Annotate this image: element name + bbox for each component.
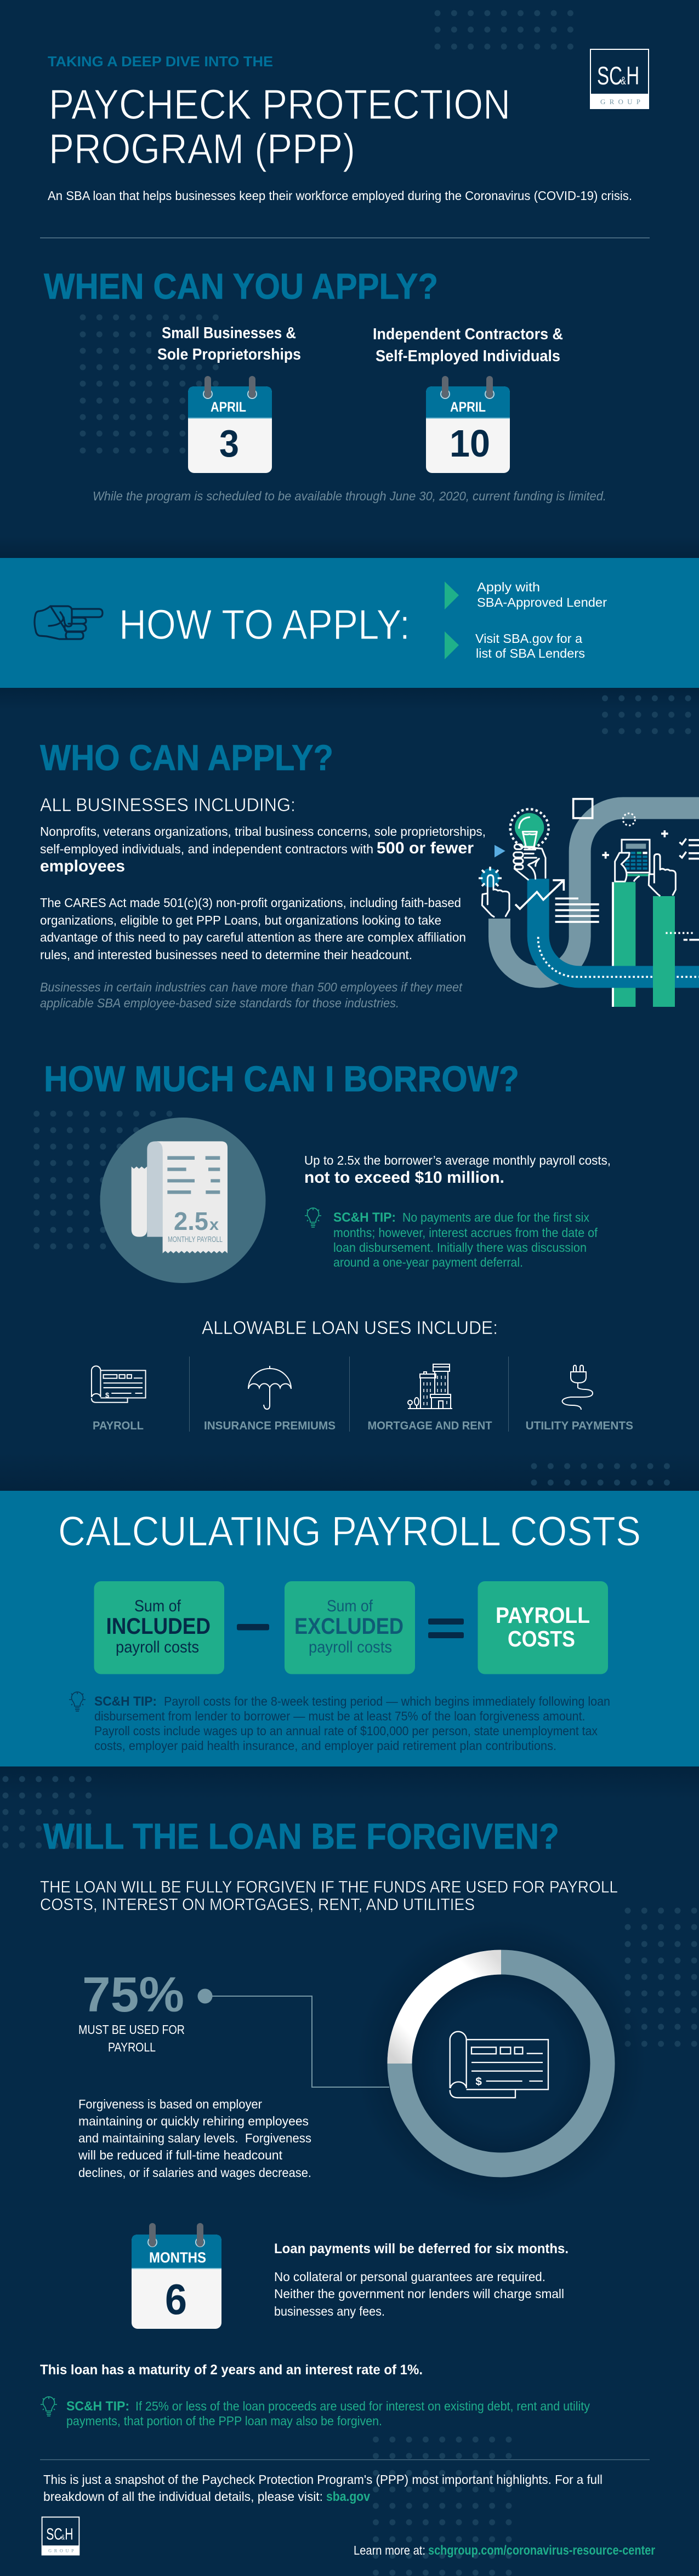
use: payroll: PAYROLL bbox=[93, 1420, 144, 1432]
box: excluded: EXCLUDED bbox=[294, 1613, 404, 1639]
heading: CALCULATING PAYROLL COSTS bbox=[58, 1508, 641, 1555]
SC&H tip: around a one-year payment deferral. bbox=[333, 1255, 523, 1269]
eligibility text: 500 or fewer bbox=[377, 839, 474, 857]
title: PROGRAM (PPP) bbox=[49, 126, 355, 173]
box: included: INCLUDED bbox=[106, 1613, 211, 1639]
section: how much can I borrow bbox=[37, 1058, 633, 1432]
subtitle: An SBA loan that helps businesses keep their workforce employed during the Coronavirus (COVID-19) crisis. bbox=[48, 189, 632, 203]
header bbox=[48, 13, 649, 203]
CARES Act text: advantage of this need to pay careful attention as there are complex affiliation bbox=[40, 930, 466, 944]
heading: WHEN CAN YOU APPLY? bbox=[44, 266, 438, 306]
logo: & bbox=[61, 2534, 65, 2541]
SC&H tip: SC&H TIP: bbox=[66, 2399, 129, 2414]
box: payroll costs: COSTS bbox=[508, 1626, 575, 1651]
logo: SC bbox=[46, 2526, 62, 2543]
step: lender: Apply with bbox=[477, 580, 540, 594]
column heading: small businesses: Small Businesses & bbox=[162, 324, 296, 342]
calendar: April 3: APRIL bbox=[211, 400, 246, 415]
icon: paycheck: $ bbox=[475, 2076, 482, 2088]
italic note: applicable SBA employee-based size standards for those industries. bbox=[40, 996, 399, 1010]
step: visit bbox=[475, 631, 585, 660]
CARES Act text: organizations, eligible to get PPP Loans, but organizations looking to take bbox=[40, 913, 441, 927]
deferment text: Neither the government nor lenders will charge small bbox=[274, 2287, 564, 2301]
calendar: April 10 bbox=[426, 376, 510, 473]
calendar: 6 months: 6 bbox=[165, 2275, 187, 2323]
box: excluded bbox=[285, 1581, 415, 1674]
use: insurance premiums bbox=[204, 1366, 336, 1432]
loan limit text: not to exceed $10 million. bbox=[304, 1169, 504, 1187]
deferment text: businesses any fees. bbox=[274, 2304, 385, 2318]
section: when can you apply bbox=[44, 266, 606, 503]
band: how to apply bbox=[0, 558, 699, 688]
band: calculating payroll costs bbox=[0, 1491, 699, 1766]
column heading: independent contractors bbox=[373, 326, 563, 365]
SC&H tip: months; however, interest accrues from the date of bbox=[333, 1226, 598, 1240]
box: excluded: payroll costs bbox=[309, 1638, 392, 1656]
heading: HOW MUCH CAN I BORROW? bbox=[44, 1058, 519, 1099]
heading: HOW TO APPLY: bbox=[119, 601, 410, 648]
icon: tip bulb bbox=[41, 2397, 57, 2416]
logo: H bbox=[65, 2526, 73, 2543]
icon: pointing hand bbox=[35, 606, 103, 639]
use: utility payments bbox=[526, 1365, 633, 1432]
closing text bbox=[43, 2472, 603, 2504]
75 percent stat: 75% bbox=[82, 1968, 184, 2022]
forgiveness text: declines, or if salaries and wages decrease. bbox=[78, 2165, 311, 2180]
box: included bbox=[94, 1581, 224, 1674]
icon: tip bulb bbox=[305, 1208, 321, 1227]
box: included: payroll costs bbox=[116, 1638, 199, 1656]
calendar: April 10: APRIL bbox=[450, 400, 486, 415]
CARES Act text bbox=[40, 896, 466, 962]
deferment text: Loan payments will be deferred for six months. bbox=[274, 2241, 569, 2256]
use: payroll bbox=[92, 1366, 146, 1432]
CARES Act text: rules, and interested businesses need to determine their headcount. bbox=[40, 948, 412, 962]
box: excluded: Sum of bbox=[327, 1597, 373, 1615]
column heading: independent contractors: Self-Employed Individuals bbox=[376, 347, 560, 365]
SC&H tip bbox=[94, 1694, 610, 1753]
use: utility payments: UTILITY PAYMENTS bbox=[526, 1420, 633, 1432]
subheading: COSTS, INTEREST ON MORTGAGES, RENT, AND UTILITIES bbox=[40, 1895, 475, 1914]
step: lender bbox=[477, 580, 607, 609]
italic note: Businesses in certain industries can have more than 500 employees if they meet bbox=[40, 980, 463, 994]
receipt text: MONTHLY PAYROLL bbox=[168, 1235, 223, 1244]
box: included: Sum of bbox=[134, 1597, 181, 1615]
arrow bbox=[445, 631, 459, 659]
icon: paycheck bbox=[450, 2032, 548, 2098]
use: mortgage and rent: MORTGAGE AND RENT bbox=[367, 1420, 492, 1432]
funding note: While the program is scheduled to be available through June 30, 2020, current funding is limited. bbox=[93, 489, 606, 503]
logo: H bbox=[626, 62, 639, 90]
closing text: breakdown of all the individual details, please visit: bbox=[43, 2489, 323, 2504]
use: insurance premiums: INSURANCE PREMIUMS bbox=[204, 1420, 336, 1432]
forgiveness text bbox=[78, 2097, 311, 2180]
SC&H tip: loan disbursement. Initially there was discussion bbox=[333, 1240, 587, 1255]
box: payroll costs: PAYROLL bbox=[496, 1603, 590, 1628]
SC&H tip: disbursement from lender to borrower — must be at least 75% of the loan forgiveness amount. bbox=[94, 1709, 586, 1723]
SC&H tip bbox=[66, 2399, 590, 2428]
column heading: small businesses bbox=[157, 324, 301, 363]
section: will the loan be forgiven bbox=[5, 1779, 695, 2428]
step: visit: list of SBA Lenders bbox=[476, 646, 585, 660]
SC&H tip: costs, employer paid health insurance, and employer paid retirement plan contributions. bbox=[94, 1739, 556, 1753]
receipt text: 2.5 bbox=[174, 1207, 208, 1235]
calendar: 6 months: MONTHS bbox=[149, 2249, 206, 2266]
receipt text: x bbox=[209, 1216, 219, 1234]
forgiveness text: Forgiveness is based on employer bbox=[78, 2097, 262, 2111]
step: lender: SBA-Approved Lender bbox=[477, 595, 607, 609]
CARES Act text: The CARES Act made 501(c)(3) non-profit organizations, including faith-based bbox=[40, 896, 461, 910]
logo bbox=[42, 2517, 79, 2555]
logo: SC bbox=[597, 62, 622, 90]
75 percent stat bbox=[78, 1968, 185, 2054]
learn more link: schgroup.com/coronavirus-resource-center bbox=[428, 2543, 655, 2558]
SC&H tip: No payments are due for the first six bbox=[402, 1210, 589, 1224]
subheading: ALL BUSINESSES INCLUDING: bbox=[40, 795, 295, 816]
heading: WILL THE LOAN BE FORGIVEN? bbox=[43, 1816, 559, 1856]
forgiveness text: will be reduced if full-time headcount bbox=[78, 2148, 283, 2162]
SC&H tip: Payroll costs for the 8-week testing period — which begins immediately following loan bbox=[164, 1694, 610, 1708]
calendar: April 3 bbox=[188, 376, 272, 473]
closing text: sba.gov bbox=[326, 2489, 371, 2504]
maturity statement: This loan has a maturity of 2 years and an interest rate of 1%. bbox=[40, 2362, 423, 2378]
use: mortgage and rent bbox=[367, 1364, 492, 1432]
logo bbox=[590, 49, 649, 109]
eligibility text: employees bbox=[40, 857, 125, 875]
SC&H tip: Payroll costs include wages up to an annual rate of $100,000 per person, state unemployment tax bbox=[94, 1724, 598, 1738]
learn more link: Learn more at: bbox=[354, 2543, 425, 2557]
arrow bbox=[445, 582, 459, 609]
75 percent stat: MUST BE USED FOR bbox=[78, 2022, 185, 2037]
illustration: business pipes and hands bbox=[479, 799, 699, 1007]
donut chart: 75 percent bbox=[356, 1918, 646, 2209]
allowable uses heading: ALLOWABLE LOAN USES INCLUDE: bbox=[202, 1318, 498, 1338]
eligibility text bbox=[40, 824, 486, 875]
deferment text bbox=[274, 2241, 569, 2318]
step: visit: Visit SBA.gov for a bbox=[475, 631, 582, 646]
SC&H tip: SC&H TIP: bbox=[333, 1210, 396, 1225]
closing text: This is just a snapshot of the Paycheck Protection Program's (PPP) most important highlights. For a full bbox=[43, 2472, 603, 2487]
calendar: 6 months bbox=[132, 2223, 221, 2329]
icon: tip bulb bbox=[69, 1692, 86, 1711]
forgiveness text: maintaining or quickly rehiring employees bbox=[78, 2114, 309, 2128]
subheading: THE LOAN WILL BE FULLY FORGIVEN IF THE FUNDS ARE USED FOR PAYROLL bbox=[40, 1877, 618, 1896]
SC&H tip bbox=[333, 1210, 598, 1269]
footer bbox=[40, 2440, 655, 2573]
icon: receipt bbox=[132, 1141, 228, 1253]
column heading: independent contractors: Independent Contractors & bbox=[373, 326, 563, 343]
deferment text: No collateral or personal guarantees are required. bbox=[274, 2270, 545, 2284]
SC&H tip: payments, that portion of the PPP loan may also be forgiven. bbox=[66, 2414, 382, 2428]
logo: & bbox=[621, 75, 626, 87]
75 percent stat: PAYROLL bbox=[108, 2040, 156, 2054]
SC&H tip: If 25% or less of the loan proceeds are used for interest on existing debt, rent and utility bbox=[135, 2399, 590, 2413]
heading: WHO CAN APPLY? bbox=[40, 737, 333, 778]
column heading: small businesses: Sole Proprietorships bbox=[157, 346, 301, 363]
calendar: April 3: 3 bbox=[219, 422, 239, 465]
use: payroll: $ bbox=[105, 1391, 110, 1399]
learn more link bbox=[354, 2543, 655, 2558]
eligibility text: self-employed individuals, and independent contractors with bbox=[40, 842, 373, 856]
subheading bbox=[40, 1877, 618, 1914]
eyebrow heading: TAKING A DEEP DIVE INTO THE bbox=[48, 53, 273, 70]
equals sign bbox=[428, 1618, 464, 1638]
logo: GROUP bbox=[48, 2548, 74, 2553]
section: who can apply bbox=[40, 698, 699, 1010]
minus sign bbox=[237, 1624, 269, 1630]
forgiveness text: and maintaining salary levels. Forgiveness bbox=[78, 2131, 311, 2145]
loan limit text bbox=[304, 1153, 611, 1187]
receipt circle bbox=[100, 1118, 265, 1283]
box: payroll costs bbox=[478, 1581, 608, 1674]
calendar: April 10: 10 bbox=[450, 422, 490, 465]
loan limit text: Up to 2.5x the borrower’s average monthly payroll costs, bbox=[304, 1153, 611, 1167]
eligibility text: Nonprofits, veterans organizations, tribal business concerns, sole proprietorships, bbox=[40, 824, 486, 839]
SC&H tip: SC&H TIP: bbox=[94, 1694, 157, 1709]
italic note bbox=[40, 980, 463, 1010]
receipt text bbox=[168, 1207, 223, 1244]
title bbox=[49, 81, 510, 173]
connector line bbox=[197, 1988, 389, 2087]
logo: GROUP bbox=[600, 98, 640, 106]
title: PAYCHECK PROTECTION bbox=[49, 81, 510, 128]
